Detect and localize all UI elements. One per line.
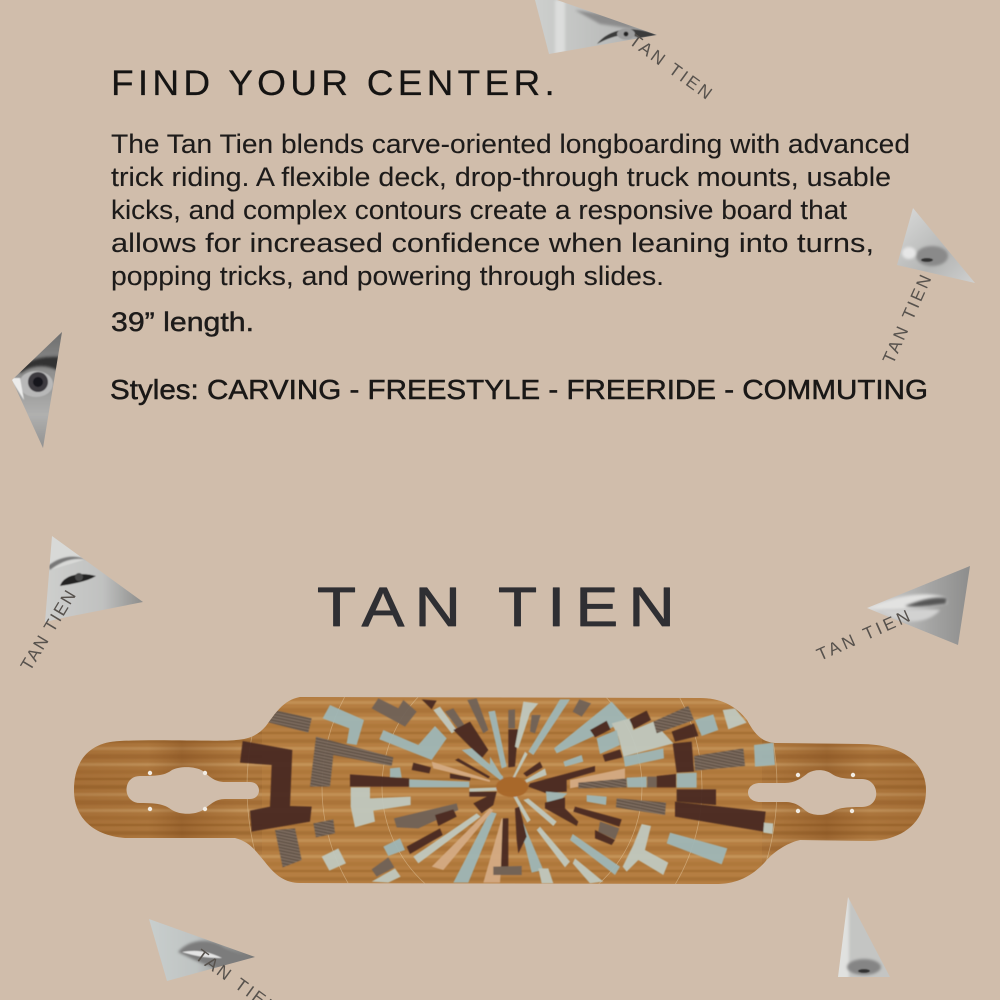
left slot cutout xyxy=(126,767,259,814)
truck mount holes xyxy=(148,771,855,813)
heading: find your center: FIND YOUR CENTER. xyxy=(111,64,559,103)
description paragraph: The Tan Tien blends carve-oriented longboarding with advanced xyxy=(111,129,910,159)
icon: nose triangle right xyxy=(897,208,975,283)
description paragraph: kicks, and complex contours create a responsive board that xyxy=(111,195,848,225)
icon: eye triangle left lower xyxy=(45,536,143,622)
icon: lips triangle bottom xyxy=(149,919,255,981)
icon: lips triangle right xyxy=(867,566,970,645)
right slot cutout xyxy=(748,770,876,815)
longboard deck xyxy=(74,697,926,884)
description paragraph: allows for increased confidence when leaning into turns, xyxy=(111,228,874,258)
length spec: 39” length. xyxy=(111,307,254,337)
description paragraph xyxy=(111,129,910,291)
icon: eye triangle left xyxy=(12,332,62,448)
label: tan tien right: TAN TIEN xyxy=(878,272,935,367)
icon: eye triangle top xyxy=(535,0,657,54)
label: tan tien right lower: TAN TIEN xyxy=(813,606,913,665)
description paragraph: trick riding. A flexible deck, drop-through truck mounts, usable xyxy=(111,162,891,192)
label: tan tien left: TAN TIEN xyxy=(16,587,80,674)
description paragraph: popping tricks, and powering through slides. xyxy=(111,261,664,291)
icon: nose triangle bottom xyxy=(838,897,890,977)
product title: tan tien: TAN TIEN xyxy=(317,575,685,638)
styles line: Styles: CARVING - FREESTYLE - FREERIDE - COMMUTING xyxy=(110,374,928,405)
label: tan tien top: TAN TIEN xyxy=(626,30,716,103)
